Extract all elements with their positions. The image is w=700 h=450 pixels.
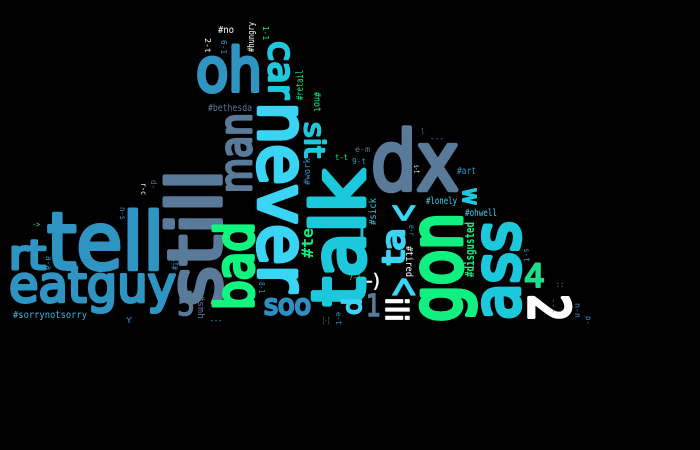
word: ass: ass: [461, 221, 535, 320]
token: arrow: ->: [32, 220, 40, 229]
hashtag: sorrynotsorry: #sorrynotsorry: [13, 310, 87, 321]
word: d: d: [338, 298, 368, 315]
hashtag: te: #te: [298, 228, 317, 258]
word: 1: 1: [366, 289, 381, 324]
word: ta: ta: [377, 228, 412, 265]
hashtag: sick: #sick: [368, 198, 379, 225]
symbol: underscore: _: [360, 226, 406, 270]
token: brackets: [-]: [322, 316, 330, 325]
hashtag: disgusted: #disgusted: [463, 222, 477, 277]
word: oh: oh: [196, 36, 262, 106]
token: 1-1: 1-1: [261, 26, 270, 40]
hashtag: not: #not: [311, 92, 322, 112]
word: dx: dx: [371, 115, 459, 210]
token: bar: l: [421, 127, 424, 136]
symbol: smiley: -): [366, 270, 380, 292]
token: a-a: a-a: [44, 256, 53, 270]
token: n-n: n-n: [573, 303, 582, 318]
hashtag: no: #no: [218, 25, 234, 36]
hashtag: bethesda: #bethesda: [208, 103, 252, 114]
token: 6-1: 6-1: [219, 40, 228, 54]
hashtag: art: #art: [457, 166, 476, 177]
token: dashes top: ---: [430, 134, 444, 143]
token: s-t center: s-t: [412, 165, 421, 173]
word: soo: soo: [264, 288, 311, 321]
hashtag: hungry: #hungry: [247, 22, 257, 52]
token: n-s: n-s: [118, 207, 127, 220]
token: t-t: t-t: [335, 153, 348, 162]
token: arrow right: ---: [549, 298, 558, 314]
token: e-m: e-m: [355, 145, 370, 154]
word: still: still: [153, 169, 239, 307]
symbol: less-than: <: [378, 203, 427, 223]
word: rt: rt: [9, 233, 46, 279]
word: man: man: [211, 113, 262, 193]
word: 2: 2: [515, 294, 580, 322]
hashtag: work: #work: [303, 157, 313, 185]
hashtag: tired: #tired: [403, 246, 414, 277]
token: p-: p-: [584, 316, 593, 325]
token: s-t right: s-t: [522, 248, 531, 262]
token: 7-1: 7-1: [349, 273, 361, 282]
token: 9-t: 9-t: [352, 157, 366, 166]
token: d-: d-: [149, 180, 158, 189]
token: r-c: r-c: [139, 183, 148, 195]
word: w: w: [457, 188, 485, 205]
word: bad: bad: [206, 222, 266, 310]
word: car: car: [260, 41, 301, 99]
word: sit: sit: [298, 122, 331, 158]
token: e-t: e-t: [334, 312, 343, 325]
word: talk: talk: [297, 170, 381, 306]
hashtag: ohwell: #ohwell: [465, 208, 497, 219]
token: 2-t: 2-t: [203, 38, 212, 53]
hashtag: retail: #retail: [295, 70, 306, 100]
token: dashes left: ---: [210, 316, 222, 325]
symbol: greater-than: >: [378, 276, 427, 298]
small tokens: [32, 26, 593, 325]
token: e-r: e-r: [407, 225, 416, 236]
word: eatguy: eatguy: [9, 256, 176, 314]
word: tell: tell: [47, 198, 164, 288]
hashtag: it: #it: [171, 258, 181, 270]
word: gon: gon: [396, 213, 478, 322]
token: Y: Y: [126, 316, 132, 325]
word: 4: 4: [524, 257, 545, 295]
token: colons: ::: [556, 280, 564, 289]
word: never: never: [242, 102, 321, 292]
token: 8-1: 8-1: [257, 282, 266, 293]
hashtag: lonely: #lonely: [426, 196, 457, 207]
word: ili: ili: [378, 297, 413, 322]
word: 5: 5: [177, 285, 195, 323]
hashtag: smh: #smh: [195, 295, 205, 319]
